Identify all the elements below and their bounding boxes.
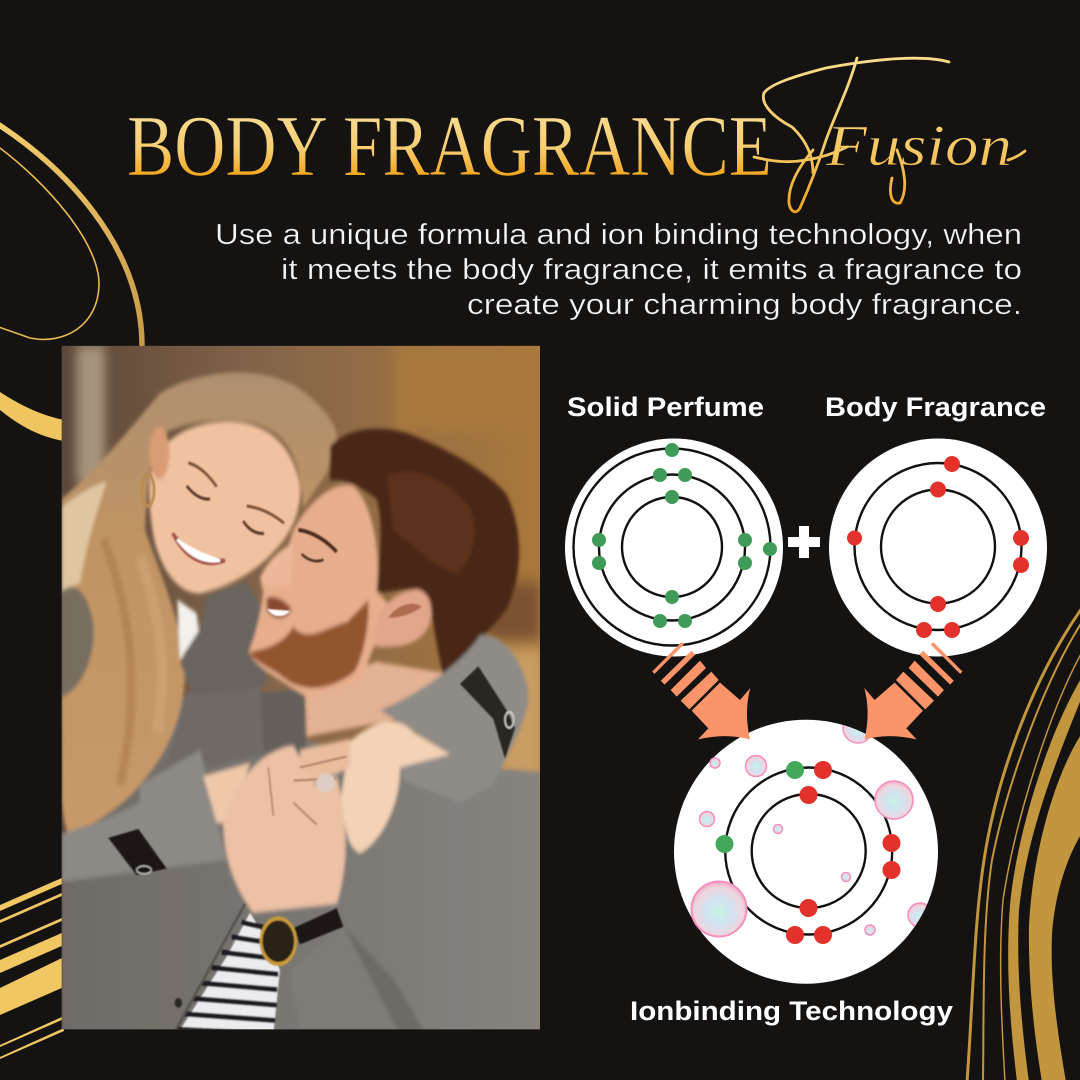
icon: plus sign xyxy=(788,526,820,558)
diagram: solid perfume atom xyxy=(565,438,783,656)
decoration: right gold waves xyxy=(967,608,1080,1080)
labels: Solid Perfume xyxy=(567,392,764,422)
labels xyxy=(567,392,1046,422)
photo: embracing couple xyxy=(62,346,540,1030)
diagram: body fragrance atom xyxy=(829,438,1047,656)
arrow: right, body fragrance to result xyxy=(864,643,961,739)
title xyxy=(127,58,1025,212)
decoration: bottom-left gold stripes xyxy=(0,877,64,1059)
bubbles xyxy=(700,713,932,935)
labels: Body Fragrance xyxy=(825,392,1046,422)
subtitle: create your charming body fragrance. xyxy=(467,289,1022,321)
subtitle: it meets the body fragrance, it emits a fragrance to xyxy=(281,254,1022,286)
title: Fusion script: Fusion xyxy=(825,113,1012,178)
title: Body Fragrance: BODY FRAGRANCE xyxy=(127,97,772,194)
diagram: ion binding result atom xyxy=(674,713,938,984)
subtitle: Use a unique formula and ion binding technology, when xyxy=(215,219,1022,251)
label: ionbinding technology: Ionbinding Technology xyxy=(630,996,953,1026)
decoration: top-left gold curves xyxy=(0,123,142,346)
decoration: left gold swoosh xyxy=(0,392,64,441)
subtitle xyxy=(215,219,1022,321)
title: script flourish xyxy=(754,58,1025,212)
arrow: left, solid perfume to result xyxy=(653,643,750,739)
